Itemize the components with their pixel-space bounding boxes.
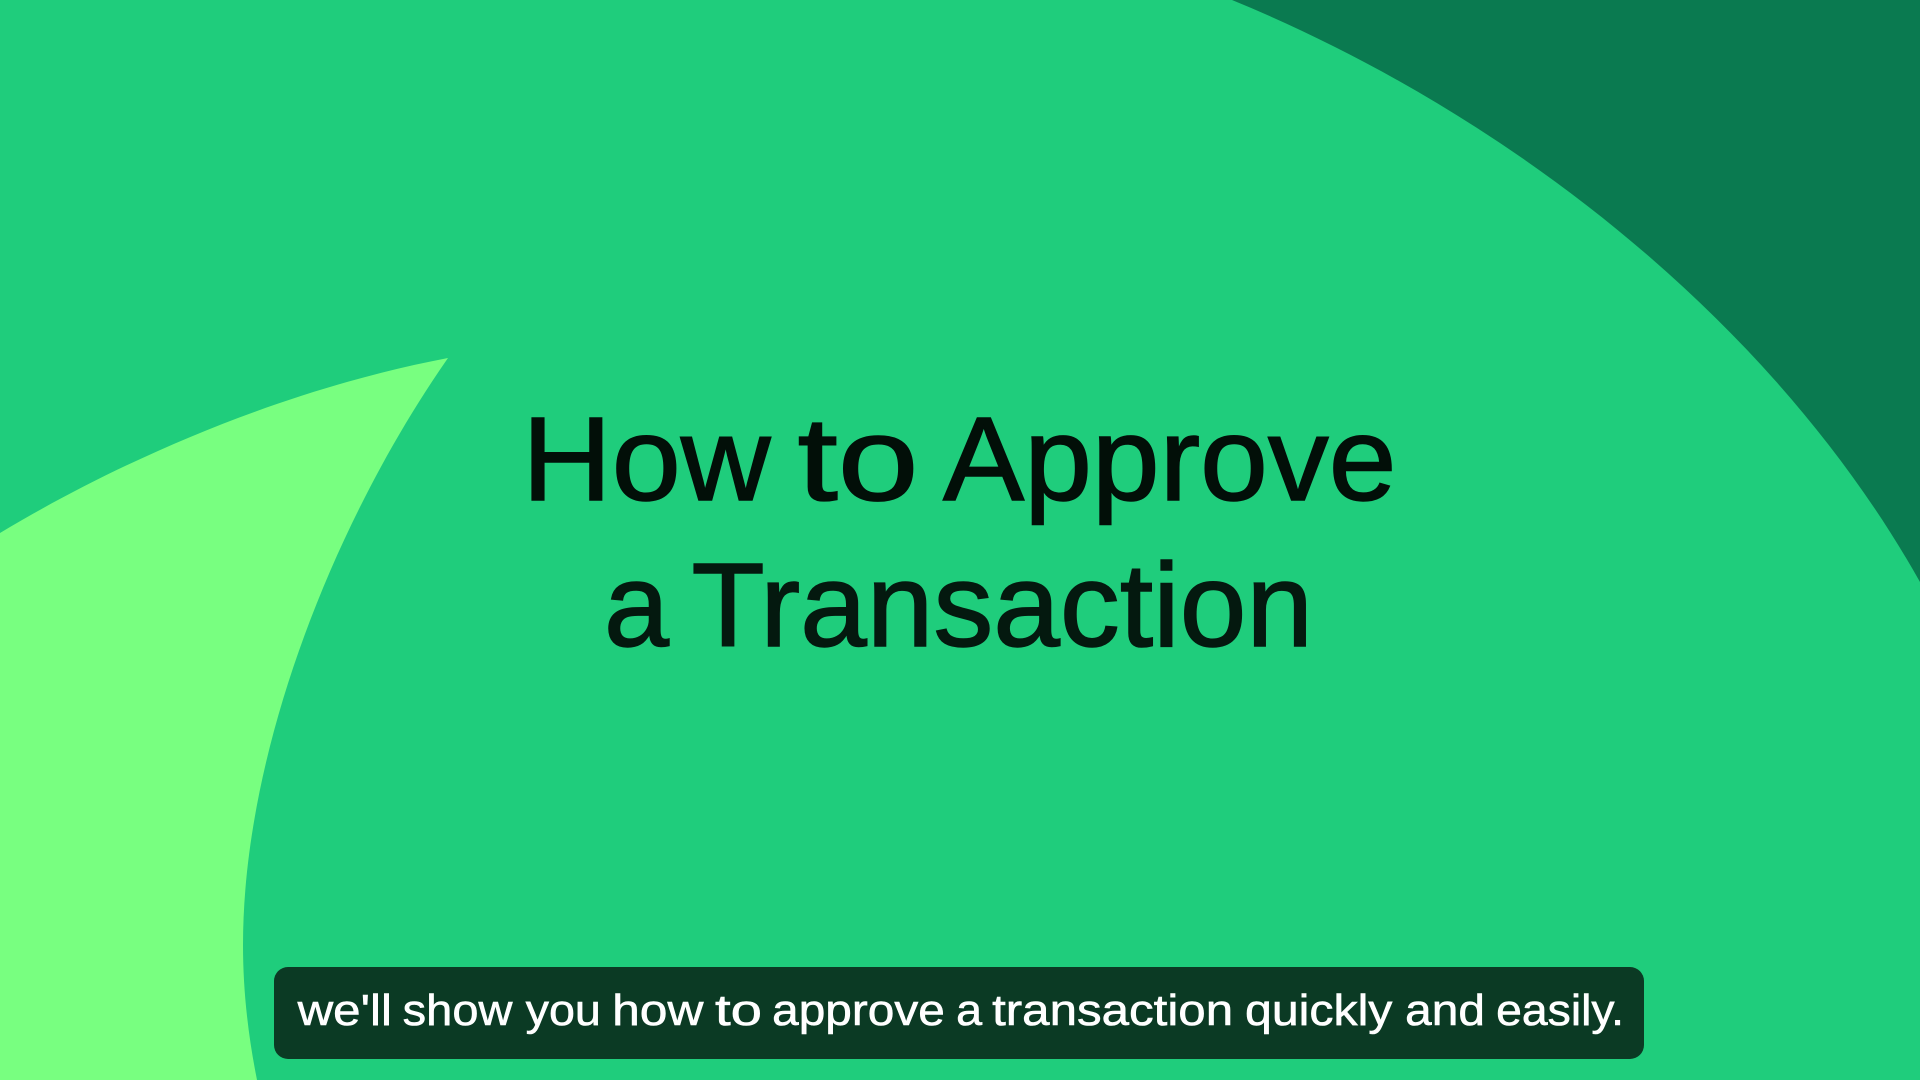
light green leaf shape — [0, 358, 448, 1080]
caption bar — [274, 967, 1644, 1059]
title: Transaction — [692, 539, 1313, 672]
caption text — [296, 986, 1624, 1035]
dark green corner shape — [1232, 0, 1920, 582]
title: How — [522, 393, 772, 526]
title — [522, 393, 1396, 672]
caption text: approve — [772, 986, 945, 1035]
caption text: easily. — [1496, 986, 1624, 1035]
title: Approve — [943, 393, 1396, 526]
title: to — [798, 393, 918, 526]
caption text: transaction — [992, 986, 1233, 1035]
caption text: we'll — [296, 986, 392, 1035]
caption text: show — [403, 986, 513, 1035]
caption text: quickly — [1245, 986, 1392, 1035]
caption text: to — [715, 986, 762, 1035]
caption text: how — [612, 986, 704, 1035]
caption text: you — [526, 986, 601, 1035]
title: a — [604, 539, 670, 672]
caption text: a — [956, 986, 983, 1035]
caption text: and — [1405, 986, 1485, 1035]
